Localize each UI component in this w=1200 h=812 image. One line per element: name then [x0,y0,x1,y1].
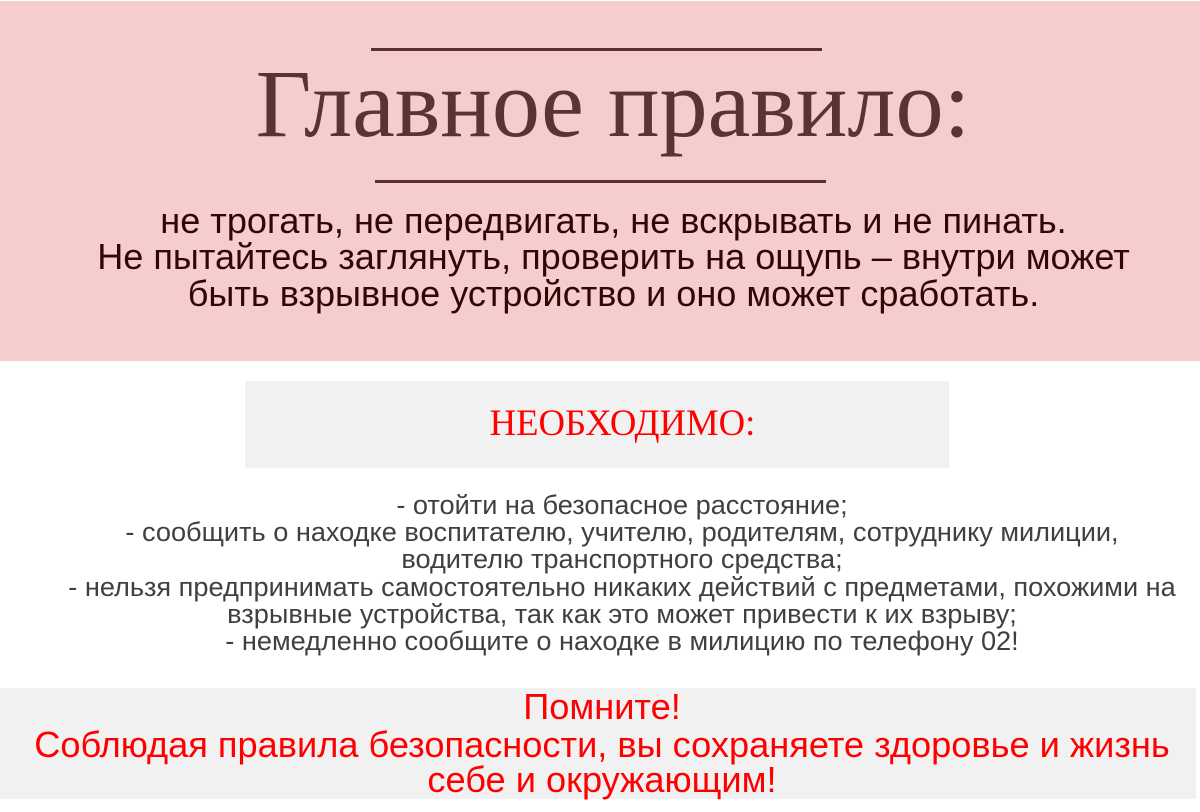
reminder text: Помните! [523,686,681,727]
title bottom rule [375,180,826,183]
main rule text: быть взрывное устройство и оно может сработать. [188,273,1039,314]
heading text: НЕОБХОДИМО: [490,402,755,443]
instructions list: - немедленно сообщите о находке в милицию по телефону 02! [225,625,1019,656]
main rule text [97,200,1130,314]
panel: reminder [0,688,1196,799]
instructions list [68,489,1176,656]
main rule text: Не пытайтесь заглянуть, проверить на ощупь – внутри может [97,236,1130,277]
panel: necessary heading [245,381,949,468]
reminder text: себе и окружающим! [427,759,777,800]
instructions list: - нельзя предпринимать самостоятельно никаких действий с предметами, похожими на [68,571,1176,602]
instructions list: - отойти на безопасное расстояние; [396,489,848,520]
instructions list: взрывные устройства, так как это может привести к их взрыву; [227,598,1017,629]
instructions list: - сообщить о находке воспитателю, учителю, родителям, сотруднику милиции, [125,516,1119,547]
reminder text: Соблюдая правила безопасности, вы сохраняете здоровье и жизнь [34,724,1170,765]
reminder text [34,686,1170,800]
panel: main rule [0,1,1200,361]
title: Главное правило: [256,50,970,157]
main rule text: не трогать, не передвигать, не вскрывать и не пинать. [160,200,1067,241]
title top rule [371,48,822,51]
instructions list: водителю транспортного средства; [401,543,843,574]
